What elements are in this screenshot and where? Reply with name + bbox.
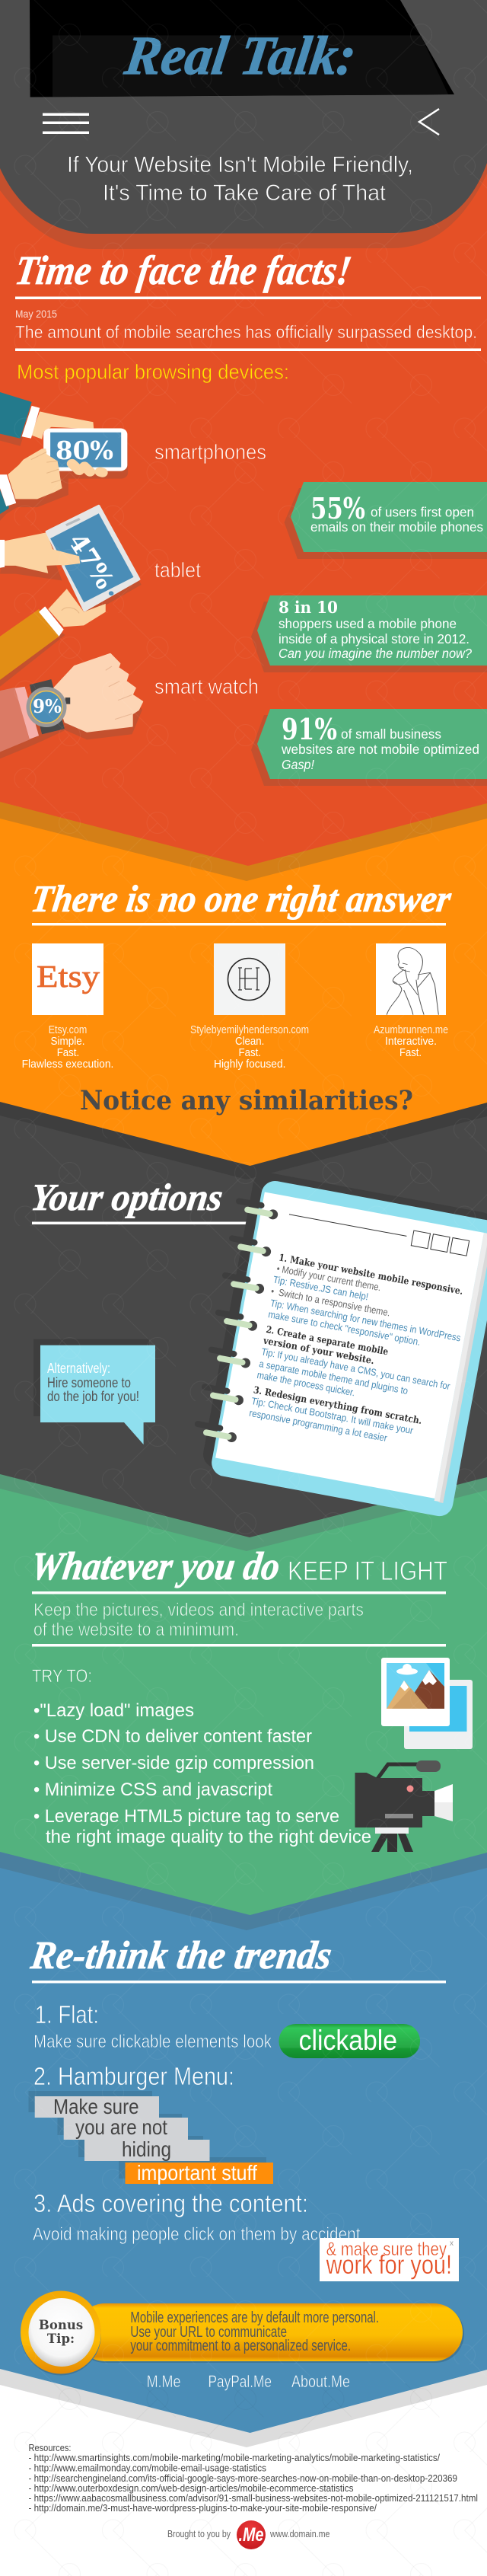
example: azumbrunnen sketch [376, 943, 446, 1015]
resources: - http://www.outerboxdesign.com/web-design-articles/mobile-ecommerce-statistics [29, 2483, 353, 2494]
callout: 55% of users: of users first open [371, 505, 474, 520]
divider [32, 923, 446, 926]
caption: stylebyemilyhenderson: Highly focused. [214, 1058, 286, 1071]
chevron shadow: blue section [0, 1447, 487, 1930]
icon: hamburger menu [43, 113, 89, 134]
callout: 91% of small business: 91% [282, 712, 337, 746]
divider [15, 297, 481, 299]
option 1: Tip: When searching for new themes in WordPress [269, 1297, 462, 1344]
callout: 8 in 10 shoppers [251, 595, 487, 672]
subtitle [67, 152, 413, 206]
links: M.Me [147, 2372, 181, 2391]
option 3 [248, 1384, 423, 1450]
bonus tip banner: Tip: [47, 2332, 75, 2346]
chevron shadow: white section [0, 1827, 487, 2447]
subtitle: If Your Website Isn't Mobile Friendly, [67, 152, 413, 177]
callout: 55% of users [285, 482, 487, 559]
list: performance tips: • Use CDN to deliver content faster [33, 1726, 312, 1747]
caption: etsy: Etsy.com [49, 1023, 87, 1036]
callout: 8 in 10 shoppers: 8 in 10 [279, 598, 338, 617]
callout: 55% of users: 55% [310, 491, 365, 525]
text: keep media to a minimum: of the website to a minimum. [33, 1620, 239, 1640]
subtitle: It's Time to Take Care of That [103, 180, 387, 206]
subheading: most popular devices: Most popular browsing devices: [17, 361, 289, 384]
list: performance tips: • Leverage HTML5 picture tag to serve [33, 1806, 339, 1827]
option 2: a separate mobile theme and plugins to [258, 1358, 409, 1397]
caption: stylebyemilyhenderson [190, 1023, 309, 1071]
heading: time to face the facts: Time to face the facts! [12, 247, 355, 293]
callout: 91% of small business: websites are not mobile optimized [281, 742, 479, 757]
resources: - http://domain.me/3-must-have-wordpress-plugins-to-make-your-site-mobile-responsive/ [29, 2503, 377, 2514]
icon: back chevron [419, 109, 439, 135]
text: make sure clickable: Make sure clickable elements look [33, 2032, 272, 2052]
caption: azumbrunnen: Interactive. [385, 1035, 437, 1048]
divider [32, 1221, 251, 1224]
panel: red section background [0, 0, 487, 866]
title: Real Talk: [121, 25, 360, 86]
option 1: • Modify your current theme. [275, 1262, 382, 1293]
callout: 8 in 10 shoppers: Can you imagine the number now? [279, 646, 472, 661]
divider [32, 1981, 446, 1983]
caption: azumbrunnen: Azumbrunnen.me [374, 1023, 448, 1036]
panel: blue section background [0, 1827, 487, 2433]
option 2: make the process quicker. [256, 1369, 356, 1398]
chevron shadow: green section [0, 1066, 487, 1551]
ad box [320, 2238, 459, 2281]
stacked menu boxes: Make sure [53, 2095, 138, 2118]
list: performance tips: •"Lazy load" images [33, 1700, 194, 1721]
callout: alternatively hire someone: do the job for you! [47, 1389, 139, 1404]
callout: alternatively hire someone: Hire someone to [47, 1375, 131, 1390]
example: stylebyemilyhenderson logo [214, 943, 285, 1015]
caption: azumbrunnen [374, 1023, 448, 1059]
links [147, 2372, 350, 2391]
resources [29, 2443, 478, 2514]
callout: 8 in 10 shoppers: shoppers used a mobile phone [279, 616, 457, 631]
resources: Resources: [29, 2443, 72, 2453]
list: performance tips: the right image quality to the right device [46, 1827, 371, 1847]
list: performance tips: • Minimize CSS and javascript [33, 1780, 272, 1800]
stacked menu boxes [29, 2091, 273, 2185]
illustration: hands holding tablet [0, 506, 142, 687]
panel: dark section background [0, 1066, 487, 1537]
resources: - http://www.smartinsights.com/mobile-marketing/mobile-marketing-analytics/mobile-marketing-statistics/ [29, 2453, 440, 2463]
stat: 9% smart watch: 9% [33, 695, 62, 717]
caption: stylebyemilyhenderson: Fast. [239, 1046, 261, 1059]
icon: photos [381, 1658, 473, 1749]
ad box: x [450, 2239, 454, 2248]
logo: .Me: .Me [239, 2524, 264, 2546]
callout: 8 in 10 shoppers: inside of a physical store in 2012. [279, 631, 469, 646]
option 2: 2. Create a separate mobile [266, 1323, 390, 1357]
rings [193, 1198, 279, 1443]
heading: your options: Your options [28, 1176, 225, 1218]
divider [15, 349, 481, 351]
callout: alternatively hire someone [33, 1339, 155, 1444]
list: performance tips: • Use server-side gzip compression [33, 1753, 314, 1773]
caption: etsy: Fast. [57, 1046, 79, 1059]
option 1: • Switch to a responsive theme. [270, 1285, 391, 1319]
caption: etsy: Flawless execution. [22, 1058, 113, 1071]
credit: website: www.domain.me [269, 2529, 330, 2539]
callout: 91% of small business: Gasp! [282, 757, 314, 772]
heading: re-think the trends: Re-think the trends [27, 1933, 334, 1977]
list: performance tips [33, 1700, 371, 1847]
trend 2: hamburger menu: 2. Hamburger Menu: [33, 2062, 234, 2090]
label: tablet: tablet [154, 558, 201, 582]
callout: 91% of small business [251, 709, 487, 786]
illustration: notebook with options list [186, 1168, 487, 1518]
stat: 47% tablet: 47% [62, 528, 120, 594]
bonus tip banner: Mobile experiences are by default more personal. [130, 2309, 379, 2326]
text: keep media to a minimum: Keep the pictures, videos and interactive parts [33, 1600, 364, 1620]
text: try to: TRY TO: [32, 1666, 92, 1687]
illustration: hand with smart watch [0, 654, 142, 758]
caption: azumbrunnen: Fast. [399, 1046, 422, 1059]
option 1: Tip: Restive.JS can help! [272, 1274, 369, 1302]
option 1 [266, 1251, 470, 1355]
caption: etsy [22, 1023, 113, 1071]
caption: etsy: Simple. [50, 1035, 85, 1048]
resources: - http://www.emailmonday.com/mobile-email-usage-statistics [29, 2463, 266, 2474]
heading: notice any similarities: Notice any similarities? [80, 1085, 413, 1116]
bonus tip banner: your commitment to a personalized service. [130, 2338, 351, 2354]
option 3: Tip: Check out Bootstrap. It will make your [250, 1395, 415, 1436]
callout: alternatively hire someone: Alternatively: [47, 1361, 110, 1376]
bonus tip banner: Bonus [39, 2318, 83, 2332]
divider [32, 1591, 446, 1594]
logo: .Me [237, 2520, 266, 2549]
callout: 55% of users: emails on their mobile phones [310, 519, 483, 535]
ad box: & make sure they [326, 2239, 447, 2260]
stat: 80% smartphones: 80% [56, 436, 113, 465]
option 2: version of your website. [262, 1334, 375, 1366]
links: PayPal.Me [208, 2372, 272, 2391]
icon: video camera [355, 1760, 453, 1852]
option 1: 1. Make your website mobile responsive. [278, 1251, 464, 1297]
bonus tip banner: Use your URL to communicate [130, 2324, 287, 2341]
callout: 91% of small business: of small business [341, 726, 441, 742]
option 3: 3. Redesign everything from scratch. [253, 1384, 423, 1426]
panel: orange section background [0, 761, 487, 1166]
stacked menu boxes: you are not [75, 2115, 167, 2139]
phone header shape [0, 0, 487, 249]
stacked menu boxes: hiding [122, 2137, 171, 2161]
illustration: hands holding smartphone [0, 392, 128, 521]
divider [32, 1644, 446, 1646]
heading: whatever you do: Whatever you do [28, 1544, 282, 1588]
stacked menu boxes: important stuff [137, 2161, 257, 2185]
bonus tip banner [21, 2290, 464, 2376]
resources: - http://searchengineland.com/its-official-google-says-more-searches-now-on-mobile-than-on-desktop-220369 [29, 2473, 457, 2484]
links: About.Me [291, 2372, 350, 2391]
trend 1: flat: 1. Flat: [35, 2000, 99, 2029]
ad box: work for you! [326, 2250, 452, 2280]
chevron shadow: orange section [0, 228, 487, 881]
text: keep media to a minimum [33, 1600, 364, 1640]
heading: keep it light: KEEP IT LIGHT [288, 1556, 447, 1586]
option 2 [256, 1323, 456, 1416]
example: etsy logo: Etsy [37, 959, 100, 994]
option 1: make sure to check "responsive" option. [267, 1308, 422, 1348]
chevron shadow: dark section [0, 761, 487, 1179]
label: smartphones: smartphones [154, 440, 266, 464]
option 3: responsive programming a lot easier [248, 1407, 389, 1444]
credit: brought to you by: Brought to you by [167, 2529, 231, 2539]
label: smart watch: smart watch [154, 675, 259, 698]
text: avoid accidental clicks: Avoid making people click on them by accident [33, 2224, 361, 2245]
icon: watch face [26, 687, 67, 727]
text: date: May 2015 [15, 308, 57, 320]
caption: stylebyemilyhenderson: Clean. [235, 1035, 264, 1048]
panel: green section background [0, 1447, 487, 1915]
trend 3: ads covering the content: 3. Ads covering the content: [33, 2189, 308, 2217]
option 2: Tip: If you already have a CMS, you can search for [260, 1345, 451, 1392]
button: clickable [279, 2024, 420, 2058]
button: clickable: clickable [299, 2025, 397, 2056]
caption: stylebyemilyhenderson: Stylebyemilyhenderson.com [190, 1023, 309, 1036]
example: etsy logo [32, 943, 103, 1015]
heading: there is no one right answer: There is no one right answer [28, 877, 454, 920]
